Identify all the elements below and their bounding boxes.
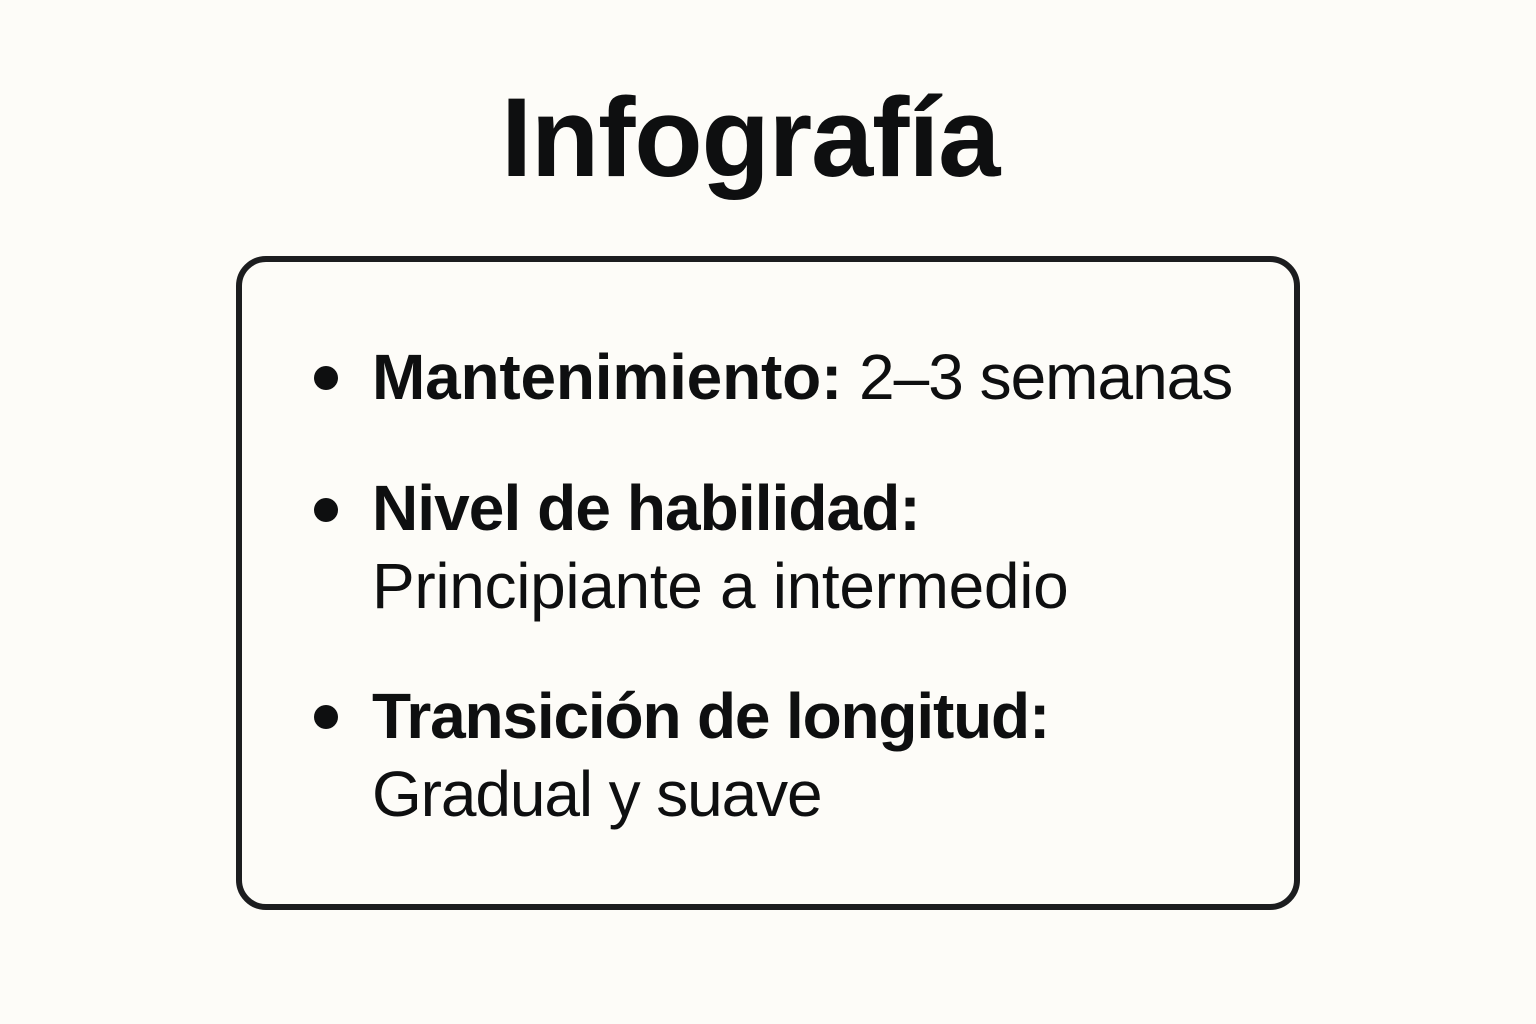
- bullet: [314, 498, 338, 522]
- list item: skill level: [314, 472, 1068, 622]
- value: Gradual y suave: [372, 758, 822, 830]
- panel: details: [236, 256, 1300, 910]
- title: Infografía: [501, 75, 999, 200]
- list item: length transition: [314, 680, 1049, 830]
- list item: maintenance: [314, 341, 1232, 413]
- bullet: [314, 705, 338, 729]
- value: Principiante a intermedio: [372, 550, 1068, 622]
- label: Nivel de habilidad:: [372, 472, 920, 544]
- label: Transición de longitud:: [372, 680, 1049, 752]
- value: 2–3 semanas: [859, 341, 1232, 413]
- label: Mantenimiento:: [372, 341, 842, 413]
- bullet: [314, 366, 338, 390]
